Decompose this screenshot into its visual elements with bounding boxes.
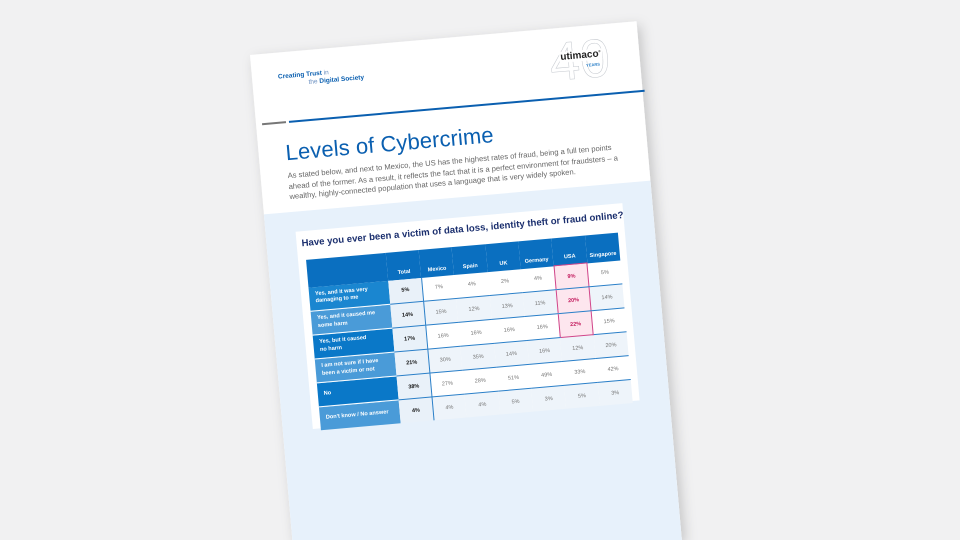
header rule: [262, 90, 645, 126]
results table: 51%: [508, 374, 519, 381]
results table: 16%: [536, 324, 548, 331]
results table: no harm: [320, 345, 342, 353]
results table: 15%: [603, 318, 615, 325]
results table: 3%: [545, 395, 553, 402]
intro paragraph: As stated below, and next to Mexico, the US has the highest rates of fraud, being a full ten points ahead of the former. As a result, it reflects the fact that it is a perfect environment for fraudsters – a wealthy, highly-connected population that uses a language that is very widely spoken.: [287, 143, 618, 201]
results table: 27%: [442, 380, 453, 387]
results table: 33%: [574, 368, 586, 375]
results table: 12%: [468, 305, 480, 312]
results table: 14%: [402, 311, 413, 318]
results table: No: [324, 390, 331, 397]
survey card: [296, 203, 640, 429]
results table: 42%: [607, 366, 619, 373]
results table: 4%: [412, 407, 420, 414]
results table: 5%: [578, 393, 586, 399]
tagline: Creating Trust in: [278, 69, 329, 81]
tagline: the Digital Society: [308, 74, 364, 86]
results table: Don't know / No answer: [326, 409, 389, 421]
results table: 4%: [534, 276, 542, 282]
results table: 49%: [541, 371, 552, 378]
results table: 14%: [601, 294, 613, 301]
results table: 11%: [535, 300, 546, 307]
results table: 35%: [472, 353, 484, 360]
results table: 17%: [404, 335, 415, 342]
results table: 38%: [408, 383, 420, 390]
results table: 7%: [435, 284, 443, 291]
tagline: [278, 69, 364, 86]
results table: 15%: [435, 308, 447, 315]
results table: 13%: [501, 303, 513, 310]
results table: 5%: [511, 398, 520, 405]
results table: 21%: [406, 359, 417, 366]
results table: 4%: [445, 404, 454, 411]
results table: Yes, and it caused me: [317, 310, 375, 321]
results table: Spain: [463, 262, 478, 270]
results table: [306, 232, 632, 430]
document page content: [262, 29, 645, 430]
results table: 22%: [570, 321, 581, 328]
results table: USA: [564, 253, 576, 260]
results table: 5%: [401, 287, 410, 294]
results table: Yes, but it caused: [319, 335, 367, 345]
results table: 30%: [440, 356, 451, 363]
results table: Total: [397, 268, 411, 275]
results table: some harm: [318, 320, 348, 329]
results table: 16%: [539, 347, 550, 354]
results table: 9%: [567, 273, 576, 280]
results table: 5%: [601, 270, 609, 276]
results table: I am not sure if I have: [321, 358, 379, 369]
results table: 3%: [611, 390, 619, 396]
results table: UK: [499, 260, 508, 267]
results table: 28%: [475, 377, 486, 384]
logo: utimaco 40 years: utimaco®: [560, 49, 601, 63]
results table: 20%: [568, 297, 579, 304]
results table: Singapore: [589, 250, 617, 259]
results table: 12%: [572, 345, 583, 352]
results table: Germany: [524, 256, 549, 264]
results table: 4%: [478, 401, 487, 408]
logo: utimaco 40 years: YEARS: [586, 62, 600, 68]
results table: damaging to me: [315, 295, 359, 304]
results table: 14%: [506, 350, 517, 357]
results table: 4%: [468, 281, 476, 288]
results table: Yes, and it was very: [315, 286, 368, 297]
results table: 16%: [470, 329, 482, 336]
results table: 2%: [501, 279, 509, 285]
results table: been a victim or not: [322, 366, 375, 376]
question heading: Have you ever been a victim of data loss, identity theft or fraud online?: [301, 210, 624, 249]
results table: 20%: [605, 342, 617, 349]
results table: 16%: [437, 332, 449, 339]
results table: Mexico: [428, 265, 447, 273]
title: Levels of Cybercrime: [285, 122, 495, 165]
results table: 16%: [504, 326, 515, 333]
